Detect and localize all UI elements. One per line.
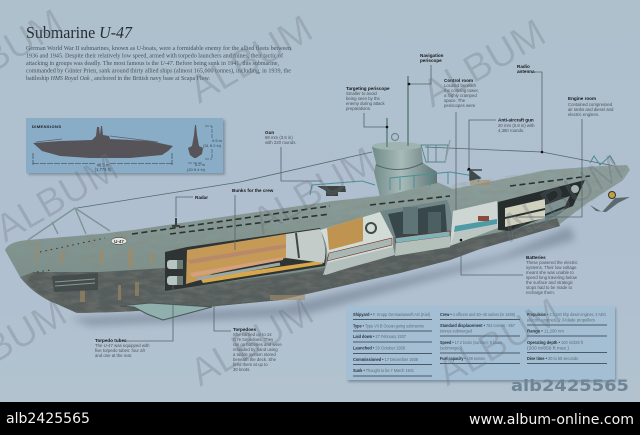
- length dimension: [33, 153, 172, 172]
- spec column 3: electric engines, 2 3-blade propellers: [527, 318, 596, 322]
- panel: dimensions: [26, 118, 225, 175]
- front silhouette: [188, 125, 203, 158]
- watermarks: ALBUM: [182, 7, 320, 112]
- label: control room: a highly cramped: [444, 93, 477, 98]
- label: batteries: meant she was unable to: [526, 270, 574, 275]
- beam and height dimensions: 9.5 m: [212, 138, 223, 143]
- intro text: battleship HMS Royal Oak , anchored in the British navy base at Scapa Flow.: [26, 75, 210, 82]
- label: torpedoes: Torpedoes: [233, 327, 257, 332]
- number plate: [111, 238, 127, 244]
- label: targeting periscope: [346, 86, 390, 128]
- label: engine room: Contained compressed: [568, 102, 613, 107]
- label: targeting periscope: enemy during attack: [346, 101, 386, 106]
- spec column 1: Shipyard • F. Krupp Germaniawerft AG (Kiel): [353, 312, 430, 317]
- spec column 1: [353, 312, 430, 373]
- hull upper: [5, 165, 630, 290]
- label: radar: [176, 195, 208, 217]
- label: targeting periscope: preparations.: [346, 106, 371, 111]
- label: torpedoes: 30 knots.: [233, 367, 250, 372]
- spec column 2: (submerged): [440, 346, 462, 350]
- image id stamp: alb2425565: [511, 376, 629, 395]
- label: bunks for the crew: Bunks for the crew: [232, 188, 274, 193]
- masts: [387, 76, 408, 147]
- watermarks: ALBUM: [183, 290, 321, 395]
- label: control room: periscopes were: [444, 103, 476, 108]
- bow net cutter: [28, 208, 110, 240]
- label: control room: the conning tower,: [444, 88, 479, 93]
- spec column 3: Operating depth • 100 m/328 ft: [527, 340, 584, 345]
- antenna wires: [77, 147, 620, 208]
- submarine cutaway: [5, 76, 630, 326]
- compartment: crew: [320, 212, 395, 275]
- label: control room: Control room: [444, 78, 473, 83]
- label: batteries: [460, 239, 578, 295]
- anti-aircraft gun: [467, 170, 482, 180]
- label: torpedoes: reloaded by hand using: [233, 347, 278, 352]
- title: Submarine U-47: [26, 23, 133, 42]
- spec column 2: [440, 312, 515, 361]
- intro text: attacking in groups was deadly. The most famous is the U-47. Before being sunk in 1941, this submarine,: [26, 60, 279, 67]
- spec lines: [353, 320, 607, 376]
- deck vents: [132, 176, 590, 234]
- label: navigation periscope: Navigation: [420, 53, 444, 58]
- watermarks: ALBUM: [245, 139, 383, 244]
- label: batteries: systems. Their low voltage: [526, 265, 577, 270]
- length dimension: (1,775 ft): [95, 167, 112, 172]
- label: navigation periscope: periscope: [420, 58, 442, 63]
- label: gun: 88 mm (3.5 in): [265, 135, 293, 140]
- beam and height dimensions: (20 ft 4 in): [187, 167, 206, 172]
- footer id: alb2425565: [6, 411, 90, 427]
- intro text: German World War II submarines, known as U-boats, were a formidable enemy for the allied fleets between: [26, 45, 292, 52]
- footer bar: [0, 402, 640, 435]
- spec column 3: Range • 11,200 nm: [527, 328, 564, 334]
- compartment: galley: [450, 201, 498, 246]
- label: targeting periscope: Smaller to avoid: [346, 91, 377, 96]
- label: torpedoes: beneath the deck. She: [233, 357, 277, 362]
- spec column 1: Type • Type VII B Ocean-going submarine: [353, 324, 424, 328]
- label: radio antenna: antenna: [517, 69, 535, 74]
- label: engine room: [516, 96, 614, 217]
- label: engine room: electric engines.: [568, 112, 599, 117]
- spec column 2: Fuel capacity • 108 tonnes: [440, 356, 486, 361]
- spec column 1: Commissioned • 17 December 1938: [353, 357, 418, 362]
- label: torpedoes: a tackle system stored: [233, 352, 276, 357]
- label: gun: Gun: [265, 130, 274, 135]
- label: batteries: These powered the electric: [526, 260, 578, 265]
- label: gun: with 220 rounds.: [265, 140, 297, 145]
- watermarks: ALBUM: [415, 11, 553, 116]
- hull shadow: [70, 226, 575, 326]
- side silhouette: [33, 126, 173, 158]
- spec column 1: Launched • 29 October 1938: [353, 346, 405, 350]
- label: control room: [444, 78, 479, 210]
- rust streaks: [36, 180, 490, 302]
- label: anti-aircraft gun: Anti-aircraft gun: [498, 118, 534, 122]
- label: targeting periscope: being seen by the: [346, 96, 381, 101]
- length dimension: 46.5 m: [97, 162, 110, 168]
- spec column 2: Crew • 4 officers and 30–40 sailors (in 1939): [440, 312, 515, 317]
- label: torpedoes: fired them at up to: [233, 362, 268, 367]
- beam and height dimensions: (31 ft 2 in): [203, 143, 222, 148]
- intro text: commanded by Günter Prien, sank around thirty allied ships (almost 165,000 tonnes), including, in 1939, the: [26, 68, 291, 74]
- label: radio antenna: [517, 64, 543, 153]
- label: gun: [265, 130, 322, 181]
- compartment: control room: [380, 200, 452, 256]
- spec column 3: (200 m/656 ft max.): [527, 346, 570, 350]
- label: anti-aircraft gun: 20 mm (0.8 in) with: [498, 123, 535, 128]
- intro text: 1936 and 1945. Despite their relatively low speed, armed with torpedo launchers and mines, their tactic of: [26, 52, 284, 60]
- label: anti-aircraft gun: [468, 118, 535, 170]
- footer url: www.album-online.com: [469, 412, 634, 428]
- panel: specifications: [346, 306, 616, 382]
- hull mottling: [5, 165, 627, 313]
- label: batteries: Batteries: [526, 255, 546, 260]
- label: control room: Located beneath: [444, 83, 477, 88]
- label: torpedoes: She carried up to 14: [233, 332, 272, 337]
- spec column 3: Propulsion • 2 3,240 bhp diesel engines, 2 AEG: [527, 312, 606, 317]
- label: torpedoes: ran on batteries and were: [233, 342, 282, 347]
- radar mast: [172, 218, 180, 226]
- deck railing: [310, 156, 615, 195]
- label: targeting periscope: Targeting periscope: [346, 86, 390, 91]
- label: batteries: spend long traveling below: [526, 275, 578, 280]
- label: anti-aircraft gun: 4,380 rounds.: [498, 128, 524, 133]
- label: torpedoes: [214, 285, 282, 372]
- spec column 1: Laid down • 27 February 1937: [353, 334, 406, 339]
- label: torpedo tubes: and one at the rear.: [95, 353, 132, 358]
- label: control room: space. The: [444, 98, 466, 103]
- stern fittings: [590, 192, 630, 212]
- dimensions heading: DIMENSIONS: [32, 124, 61, 129]
- label: torpedoes: G7e torpedoes. They: [233, 337, 274, 342]
- spec column 3: Dive time • 30 to 50 seconds: [527, 356, 579, 361]
- torpedo tubes: [167, 260, 183, 285]
- compartment: torpedo room: [165, 228, 326, 291]
- spec column 1: Sunk • Thought to be 7 March 1941: [353, 368, 414, 373]
- bow hatch details: [37, 238, 105, 272]
- spec column 2: Speed • 17.2 knots (surface); 8 knots: [440, 340, 503, 345]
- spec column 3: [527, 312, 606, 361]
- label: torpedo tubes: [95, 285, 173, 358]
- label: torpedo tubes: The U-47 was equipped with: [95, 343, 150, 348]
- conning tower: [372, 76, 450, 197]
- watermarks: ALBUM: [430, 290, 568, 395]
- spec column 2: Standard displacement • 753 tonnes - 857: [440, 323, 515, 328]
- keel fin: [120, 303, 212, 320]
- label: radio antenna: Radio: [517, 64, 530, 69]
- label: torpedo tubes: five torpedo tubes: four afr: [95, 348, 146, 353]
- label: bunks for the crew: [232, 188, 274, 250]
- beam and height dimensions: [187, 126, 223, 172]
- dark lower band: [27, 218, 560, 313]
- label: batteries: stops had to be made to: [526, 285, 573, 290]
- compartment: engine room: [498, 180, 585, 231]
- beam and height dimensions: 6.2 m: [195, 162, 206, 167]
- intro text: [26, 45, 292, 82]
- deck gun: [317, 186, 346, 196]
- hull lower: [20, 180, 623, 313]
- label: torpedo tubes: Torpedo tubes: [95, 338, 127, 343]
- watermarks: ALBUM: [493, 146, 631, 251]
- label: radar: Radar: [195, 195, 208, 200]
- number plate: U-47: [114, 239, 124, 244]
- spec column 2: tonnes submerged: [440, 328, 472, 334]
- label: engine room: air tanks and diesel and: [568, 107, 614, 112]
- label: navigation periscope: [408, 53, 444, 85]
- label: batteries: recharge them.: [526, 290, 555, 295]
- label: engine room: Engine room: [568, 96, 596, 101]
- label: batteries: the surface and strategic: [526, 280, 574, 285]
